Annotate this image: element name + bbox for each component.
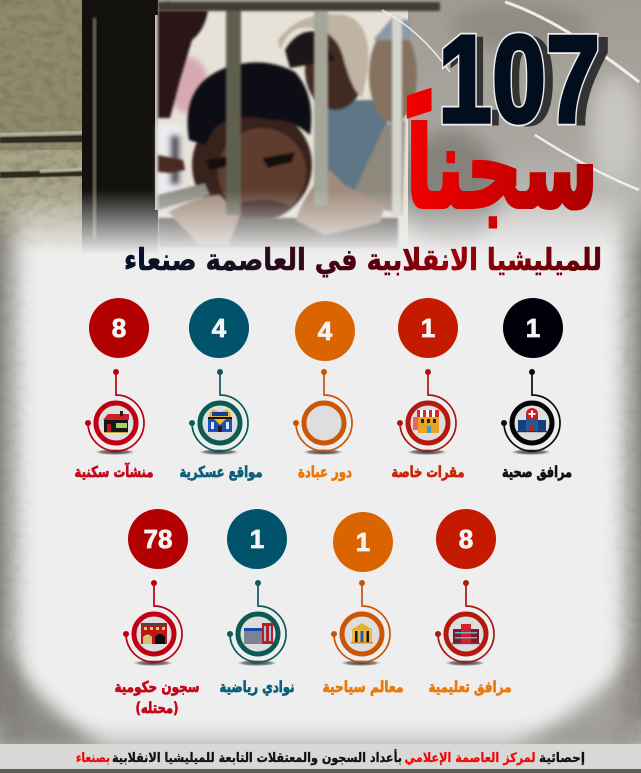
connector and ring icon: [331, 580, 390, 666]
count circle: 1: [250, 524, 264, 554]
count circle: [436, 509, 496, 569]
label: سجون حكومية: [114, 678, 200, 696]
back man with turban: [277, 13, 389, 191]
count circle: 4: [318, 316, 333, 346]
connector and ring icon: [293, 369, 352, 455]
connector and ring icon: [85, 369, 144, 455]
footer source text: لمركز العاصمة الإعلامي: [404, 751, 536, 766]
footer source text: بصنعاء: [76, 751, 110, 766]
hands on bars: [158, 170, 398, 248]
stat: government prisons: [114, 509, 200, 717]
prison bars: [158, 2, 440, 215]
label: (محتله): [136, 699, 178, 717]
window opening: [158, 8, 408, 248]
stone wall at left: [0, 0, 82, 150]
count circle: 4: [212, 313, 227, 343]
count circle: [333, 512, 393, 572]
right man: [350, 18, 417, 215]
count circle: [503, 298, 563, 358]
count circle: [89, 298, 149, 358]
stat: residential buildings: [74, 298, 154, 481]
dark column: [82, 0, 158, 270]
count circle: 8: [112, 313, 126, 343]
stat: places of worship: [293, 301, 355, 481]
connector and ring icon: [189, 369, 248, 455]
count circle: 1: [526, 313, 540, 343]
label: دور عبادة: [298, 463, 352, 481]
count circle: 8: [459, 524, 473, 554]
count circle: [398, 298, 458, 358]
concrete wall at right: [400, 2, 640, 250]
stat: tourist landmarks: [322, 512, 404, 696]
label: نوادي رياضية: [220, 678, 294, 697]
footer band: [0, 744, 641, 773]
stat: military sites: [180, 298, 262, 481]
count circle: 1: [356, 527, 370, 557]
label: مرافق صحية: [502, 463, 572, 481]
label: معالم سياحية: [322, 678, 404, 696]
stat: health facilities: [501, 298, 572, 481]
footer source text: [76, 749, 585, 766]
label: مقرات خاصة: [392, 463, 464, 481]
connector and ring icon: [227, 580, 286, 666]
label: [114, 678, 200, 717]
left man silhouette: [158, 10, 208, 118]
central boy: [188, 62, 312, 223]
count circle: 1: [421, 313, 435, 343]
connector and ring icon: [123, 580, 182, 666]
label: منشآت سكنية: [74, 463, 154, 481]
barbed wire: [382, 2, 639, 190]
count circle: [128, 509, 188, 569]
stat: educational facilities: [428, 509, 512, 696]
count circle: [189, 298, 249, 358]
photo: prisoners behind bars: [0, 0, 641, 270]
stat: sports clubs: [220, 509, 294, 697]
title: number 107: 107: [438, 11, 600, 149]
connector and ring icon: [435, 580, 494, 666]
label: مواقع عسكرية: [180, 463, 262, 481]
count circle: [227, 509, 287, 569]
connector and ring icon: [501, 369, 560, 455]
page background: [0, 195, 641, 744]
stat: private headquarters: [392, 298, 464, 481]
footer source text: إحصائية: [539, 751, 585, 766]
footer source text: بأعداد السجون والمعتقلات التابعة للميليشيا الانقلابية: [112, 749, 402, 766]
count circle: [295, 301, 355, 361]
title: number 107: 107: [438, 11, 600, 149]
connector and ring icon: [397, 369, 456, 455]
count circle: 78: [144, 524, 172, 554]
label: مرافق تعليمية: [428, 678, 512, 696]
